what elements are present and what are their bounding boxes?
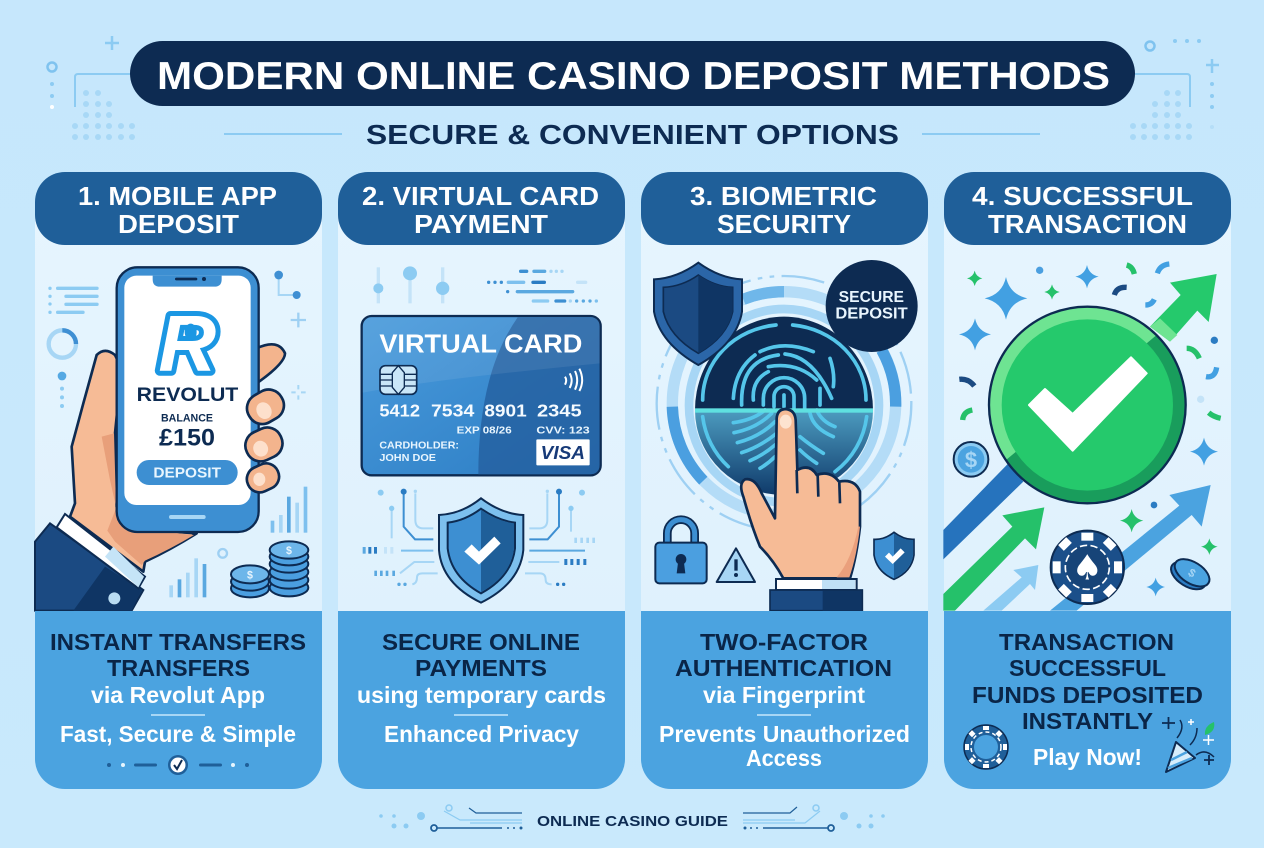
dollar coin: $ xyxy=(965,447,977,472)
caption block: Enhanced Privacy xyxy=(384,721,579,747)
heading pill: DEPOSIT xyxy=(118,209,239,239)
card number: 7534 xyxy=(431,401,475,421)
coin stacks xyxy=(231,541,308,597)
caption block: TRANSFERS xyxy=(107,655,250,681)
footer xyxy=(379,805,885,831)
heading pill xyxy=(641,172,928,245)
donut chart xyxy=(49,330,76,358)
panel: successful transaction xyxy=(943,172,1231,789)
card number: 2345 xyxy=(537,401,582,421)
heading pill: 4. SUCCESSFUL xyxy=(972,181,1193,211)
scanner rings xyxy=(657,276,911,531)
visa logo xyxy=(536,439,590,465)
suit sleeve xyxy=(35,514,145,611)
stat lines xyxy=(48,287,99,314)
caption block xyxy=(944,611,1231,789)
caption block xyxy=(35,611,322,789)
caption block: Prevents Unauthorized xyxy=(659,721,910,747)
heading pill: 3. BIOMETRIC xyxy=(690,181,877,211)
balance label: BALANCE xyxy=(161,413,213,425)
dollar coin xyxy=(954,442,988,477)
heading pill xyxy=(338,172,625,245)
caption block: INSTANT TRANSFERS xyxy=(50,629,306,655)
caption block: Play Now! xyxy=(1033,744,1142,770)
icon: small poker chip xyxy=(964,725,1008,769)
dots xyxy=(58,372,66,408)
palm shade xyxy=(102,433,194,565)
chip xyxy=(380,366,417,394)
caption block xyxy=(641,611,928,789)
arrows xyxy=(943,274,1217,611)
sliders xyxy=(373,266,449,303)
coin stacks: $ xyxy=(247,569,253,581)
card number xyxy=(379,401,582,421)
subtitle: SECURE & CONVENIENT OPTIONS xyxy=(366,119,899,150)
title banner: MODERN ONLINE CASINO DEPOSIT METHODS xyxy=(157,55,1110,98)
card details xyxy=(379,425,590,464)
small shield xyxy=(874,532,914,579)
warning triangle xyxy=(717,548,755,582)
footer label: ONLINE CASINO GUIDE xyxy=(537,813,728,830)
scan line xyxy=(695,408,873,413)
revolut logo: R xyxy=(158,299,216,388)
large shield xyxy=(654,263,742,365)
panel: virtual card payment xyxy=(338,172,625,789)
bar charts xyxy=(169,487,307,597)
balance amount: £150 xyxy=(159,425,215,452)
panel: biometric security xyxy=(641,172,928,789)
title banner xyxy=(130,41,1135,106)
fingers xyxy=(241,384,289,497)
card number: 5412 xyxy=(379,401,420,421)
dots xyxy=(1036,267,1218,508)
tilted coin xyxy=(1166,553,1214,596)
caption block: PAYMENTS xyxy=(415,655,547,681)
secure deposit badge xyxy=(826,260,918,352)
poker chip xyxy=(1051,531,1124,604)
caption block: Fast, Secure & Simple xyxy=(60,721,296,747)
card details: CVV: 123 xyxy=(536,425,590,436)
visa logo: VISA xyxy=(541,442,585,463)
footer circuit right xyxy=(743,805,885,831)
circuit dots xyxy=(363,489,595,586)
coin stacks: $ xyxy=(286,545,292,557)
credit card xyxy=(362,316,601,475)
phone xyxy=(117,267,259,532)
circuit lines xyxy=(392,493,585,584)
caption block: TRANSACTION xyxy=(999,629,1174,655)
shield with check xyxy=(439,498,523,603)
back finger xyxy=(257,344,285,383)
caption block: via Revolut App xyxy=(91,682,265,708)
caption block: FUNDS DEPOSITED xyxy=(972,682,1203,708)
footer circuit left xyxy=(379,805,522,831)
contactless icon xyxy=(565,369,582,391)
heading pill: SECURITY xyxy=(717,209,851,239)
decoration: top right tech pattern xyxy=(1130,39,1219,140)
caption block: TWO-FACTOR xyxy=(700,629,868,655)
padlock icon xyxy=(655,520,707,583)
caption block xyxy=(338,611,625,789)
fingerprint ridges xyxy=(703,325,867,472)
card details: EXP 08/26 xyxy=(457,425,512,436)
caption block: AUTHENTICATION xyxy=(675,655,892,681)
confetti xyxy=(959,264,1221,420)
deposit button xyxy=(137,460,238,485)
heading pill: PAYMENT xyxy=(414,209,548,239)
check divider xyxy=(107,755,249,775)
decoration: top left tech pattern xyxy=(48,36,135,140)
revolut wordmark: REVOLUT xyxy=(137,385,239,406)
heading pill: TRANSACTION xyxy=(988,209,1187,239)
caption block: SECURE ONLINE xyxy=(382,629,580,655)
illustration: fingerprint scanner xyxy=(654,260,918,611)
poker chip: ♠ xyxy=(1072,548,1103,588)
data dashes xyxy=(487,270,598,303)
credit card: VIRTUAL CARD xyxy=(379,329,582,359)
card details: CARDHOLDER: xyxy=(379,440,459,451)
caption block: via Fingerprint xyxy=(703,682,865,708)
deposit button: DEPOSIT xyxy=(153,465,221,481)
hand palm and thumb xyxy=(70,351,197,572)
card details: JOHN DOE xyxy=(379,453,436,464)
caption block: SUCCESSFUL xyxy=(1009,655,1166,681)
green check badge xyxy=(989,306,1186,503)
secure deposit badge: DEPOSIT xyxy=(835,306,908,323)
secure deposit badge: SECURE xyxy=(839,289,904,306)
caption block: Access xyxy=(746,745,822,771)
panel: mobile app deposit xyxy=(35,172,322,789)
pointing hand xyxy=(741,409,862,611)
tilted coin: $ xyxy=(1186,567,1198,581)
caption block: INSTANTLY xyxy=(1022,708,1153,734)
card number: 8901 xyxy=(484,401,527,421)
icon: party popper xyxy=(1162,717,1214,772)
heading pill: 1. MOBILE APP xyxy=(78,181,277,211)
illustration: virtual card and shield xyxy=(362,266,601,603)
illustration: success check xyxy=(943,264,1221,611)
node connector xyxy=(274,271,306,400)
caption block: using temporary cards xyxy=(357,682,606,708)
heading pill: 2. VIRTUAL CARD xyxy=(362,181,599,211)
illustration: hand holding phone xyxy=(35,267,308,611)
heading pill xyxy=(944,172,1231,245)
sparkles xyxy=(959,265,1218,596)
scanner disc xyxy=(695,317,873,495)
heading pill xyxy=(35,172,322,245)
